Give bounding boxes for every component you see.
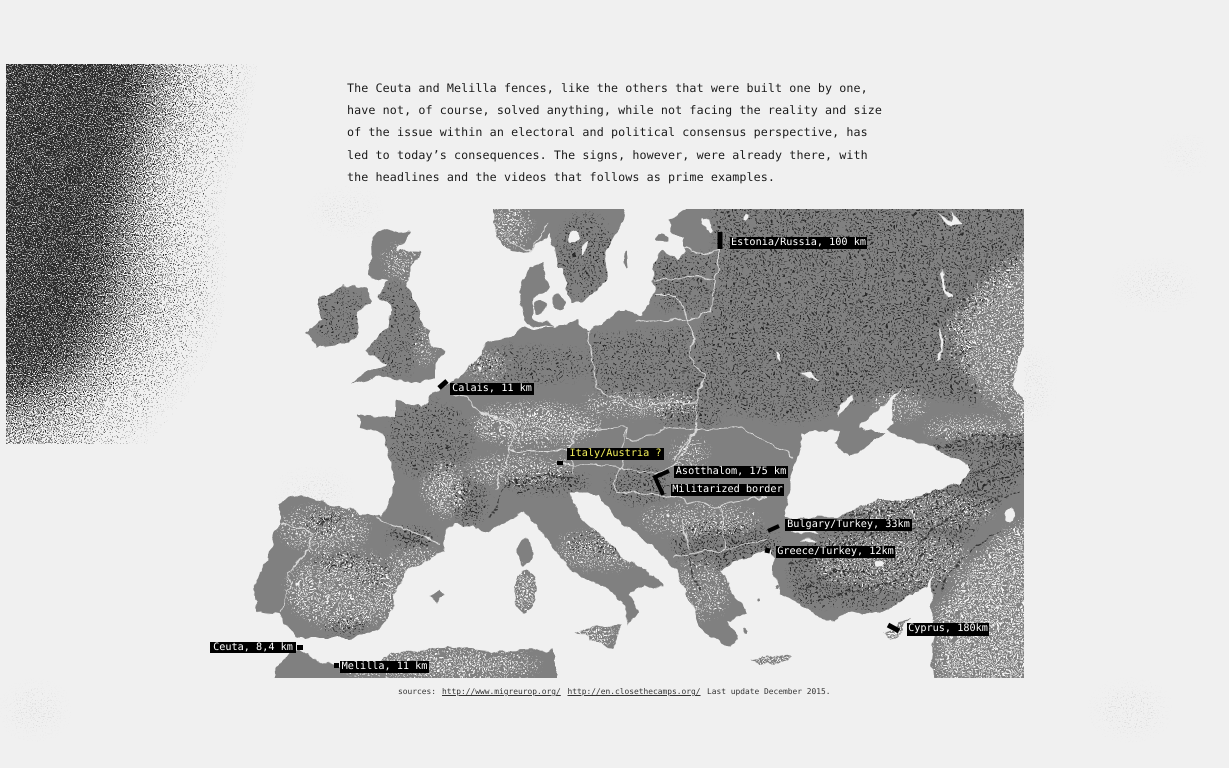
sources footnote: http://www.migreurop.org/ [442, 687, 561, 696]
marker: Estonia/Russia [718, 232, 722, 249]
label: Melilla: Melilla, 11 km [342, 661, 427, 672]
marker: Bulgary/Turkey [768, 526, 779, 531]
sources footnote: http://en.closethecamps.org/ [568, 687, 701, 696]
sources footnote: sources: [398, 687, 436, 696]
map of Europe [240, 205, 1030, 685]
background dust specks [15, 150, 1195, 724]
marker: Italy/Austria [557, 461, 563, 465]
land masses [240, 205, 1030, 685]
label: Militarized border: Militarized border [672, 484, 783, 495]
marker: Melilla [334, 663, 339, 668]
dark stipple: plains [307, 205, 1030, 631]
label: Cyprus: Cyprus, 180km [908, 623, 988, 634]
sources footnote [398, 687, 831, 696]
label: Estonia/Russia: Estonia/Russia, 100 km [731, 237, 866, 248]
marker: Cyprus [888, 625, 899, 631]
marker: Asotthalom and militarized border [655, 471, 669, 495]
intro text: The Ceuta and Melilla fences, like the others that were built one by one, have not, of course, solved anything, while not facing the reality and size of the issue within an electoral and political consensus perspective, has led to today’s consequences. The signs, however, were already there, with the headlines and the videos that follows as prime examples. [347, 81, 882, 184]
label: Asotthalom: Asotthalom, 175 km [676, 466, 786, 477]
fence markers [297, 232, 899, 668]
label: Italy/Austria: Italy/Austria ? [569, 448, 662, 459]
marker: Greece/Turkey [767, 548, 768, 553]
label: Greece/Turkey: Greece/Turkey, 12km [777, 546, 894, 557]
label: Bulgary/Turkey: Bulgary/Turkey, 33km [787, 519, 910, 530]
light stipple: relief [285, 207, 1030, 680]
label: Ceuta: Ceuta, 8,4 km [213, 642, 293, 653]
decorative stipple gradient block [0, 0, 210, 490]
sources footnote: Last update December 2015. [707, 687, 831, 696]
marker: Calais [439, 381, 447, 388]
dark ridge lines [320, 436, 1024, 600]
national borders [280, 222, 793, 613]
marker: Ceuta [297, 645, 303, 650]
seas, lakes and rivers [567, 209, 1030, 567]
label: Calais: Calais, 11 km [452, 383, 532, 394]
